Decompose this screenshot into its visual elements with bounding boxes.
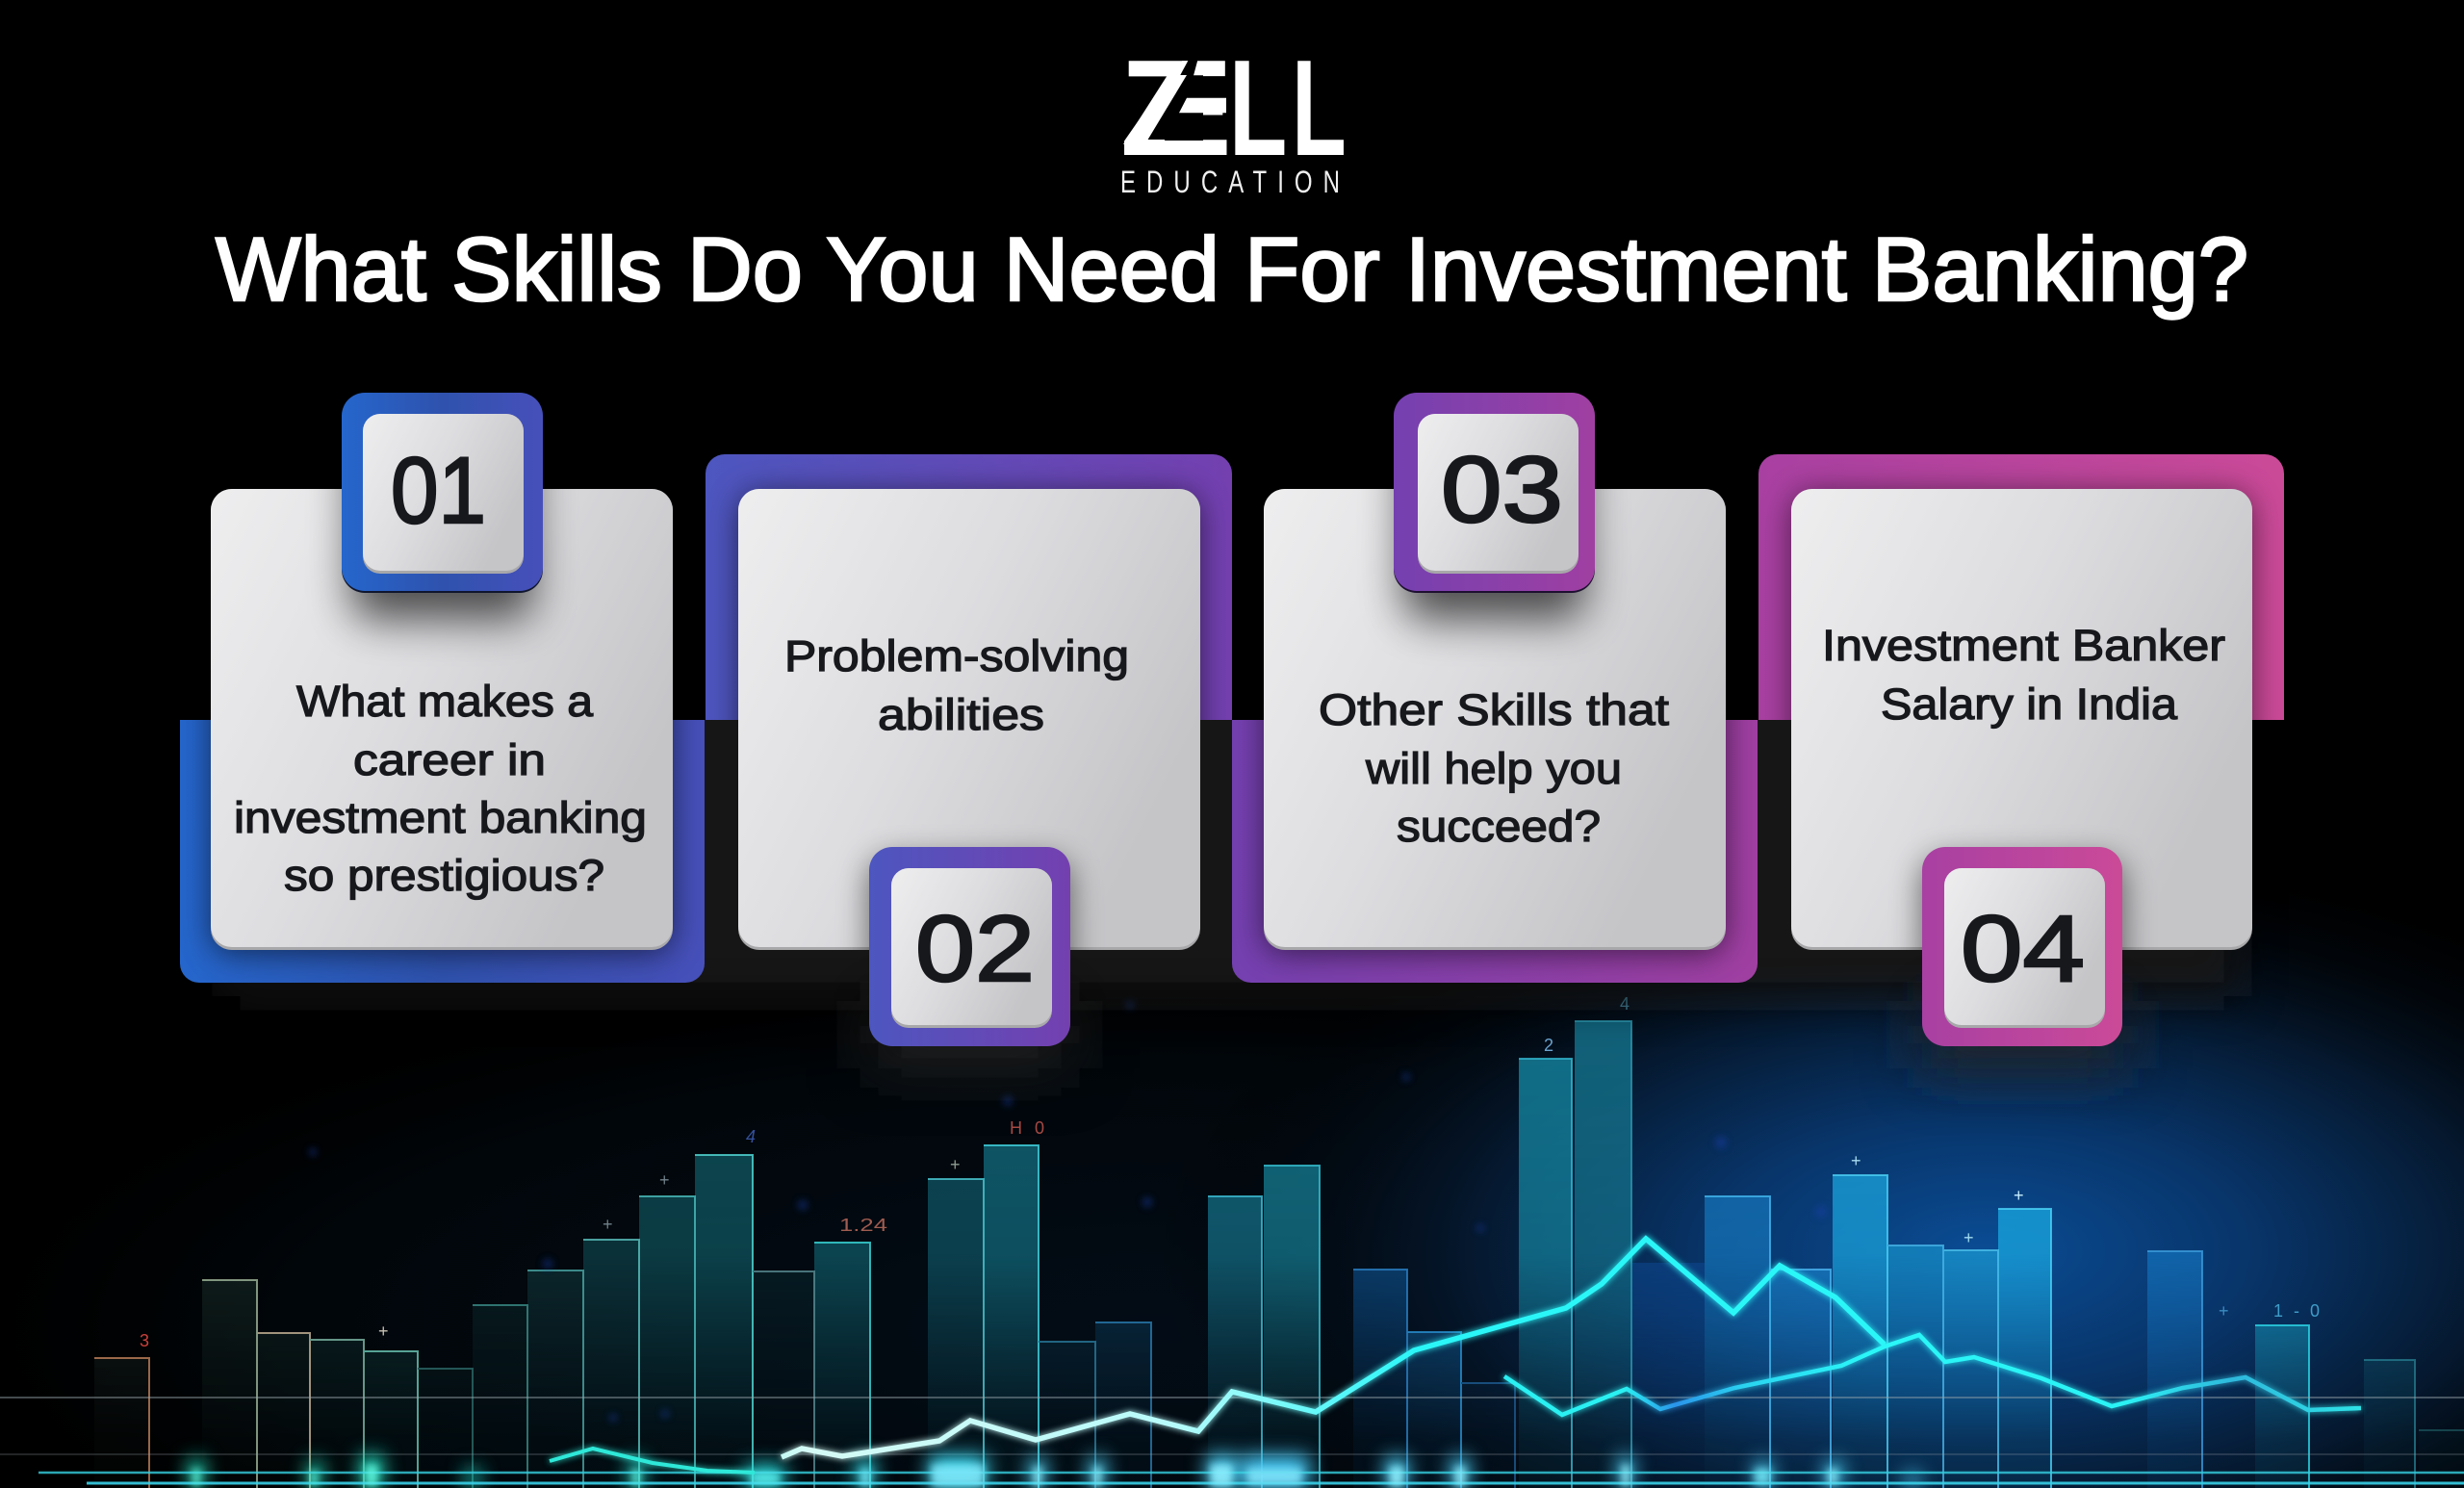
card 03 face	[1264, 489, 1726, 950]
card 01 text: so prestigious?	[284, 851, 604, 900]
badge 04: 04	[1961, 896, 2085, 1001]
line: main trend	[782, 1239, 1885, 1457]
card 04 text: Investment Banker	[1822, 621, 2225, 670]
badge 01: 01	[391, 438, 486, 543]
chart annotations: +	[2014, 1186, 2024, 1205]
chart annotations: 1.24	[839, 1216, 887, 1235]
panel: card 02	[706, 454, 1232, 1059]
title: What Skills Do You Need For Investment Banking?	[216, 218, 2248, 320]
card 01 text: What makes a	[296, 677, 594, 726]
logo: Zell Education: E	[1176, 32, 1230, 185]
chart annotations: 4	[746, 1127, 756, 1146]
logo: Zell Education: L	[1292, 32, 1347, 185]
chart annotations: +	[950, 1155, 961, 1174]
chart annotations: 1-0	[2273, 1301, 2320, 1321]
card 03 text: succeed?	[1397, 802, 1601, 851]
badge 01	[342, 393, 543, 593]
card 01 backing	[180, 720, 705, 983]
chart annotations: +	[603, 1215, 613, 1234]
logo: Zell Education: EDUCATION	[1120, 165, 1340, 199]
chart annotations: +	[1964, 1228, 1974, 1247]
logo: Zell Education	[1120, 31, 1347, 199]
chart annotations: +	[378, 1321, 389, 1341]
bar chart	[0, 1021, 2464, 1488]
trend lines	[550, 1239, 2361, 1473]
panel: card 01	[180, 393, 705, 983]
chart annotations: 3	[140, 1331, 149, 1350]
chart annotations: +	[2219, 1301, 2229, 1321]
chart annotations: H 0	[1010, 1118, 1044, 1138]
card 03 text: Other Skills that	[1319, 685, 1670, 734]
chart annotations	[140, 994, 2320, 1350]
card 04 face	[1791, 489, 2252, 950]
card 01 face	[211, 489, 673, 950]
card 02 text	[784, 631, 1129, 739]
logo: Zell Education: L	[1229, 31, 1287, 184]
card 02 face	[738, 489, 1200, 950]
line: left fragment	[550, 1449, 755, 1473]
card 03 text	[1319, 685, 1670, 851]
card 01 text	[234, 677, 647, 900]
line: secondary trend	[1504, 1335, 2361, 1415]
card 02 text: abilities	[878, 690, 1044, 739]
chart annotations: +	[1851, 1151, 1861, 1170]
panel: card 04	[1758, 454, 2284, 1059]
card 02 backing	[706, 454, 1232, 720]
card 01 text: career in	[353, 735, 546, 784]
chart annotations: 4	[1620, 994, 1630, 1013]
badge 03: 03	[1441, 437, 1563, 542]
chart annotations: +	[659, 1170, 670, 1190]
badge 03	[1394, 393, 1595, 593]
faint chart dots	[309, 1001, 1827, 1422]
card 03 backing	[1232, 720, 1758, 983]
card 04 text: Salary in India	[1881, 680, 2178, 729]
chart floor glow	[38, 1455, 2464, 1488]
badge 02: 02	[915, 896, 1035, 1001]
logo: Zell Education: Z	[1120, 33, 1194, 185]
card 03 text: will help you	[1365, 744, 1622, 793]
panel: card 03	[1232, 393, 1758, 983]
card 04 text	[1822, 621, 2225, 729]
card 01 text: investment banking	[234, 793, 647, 842]
card 04 backing	[1758, 454, 2284, 720]
card 02 text: Problem-solving	[784, 631, 1129, 680]
glow behind panels	[226, 674, 2238, 1068]
badge 02	[869, 847, 1070, 1046]
chart annotations: 2	[1544, 1036, 1553, 1055]
badge 04	[1922, 847, 2122, 1046]
